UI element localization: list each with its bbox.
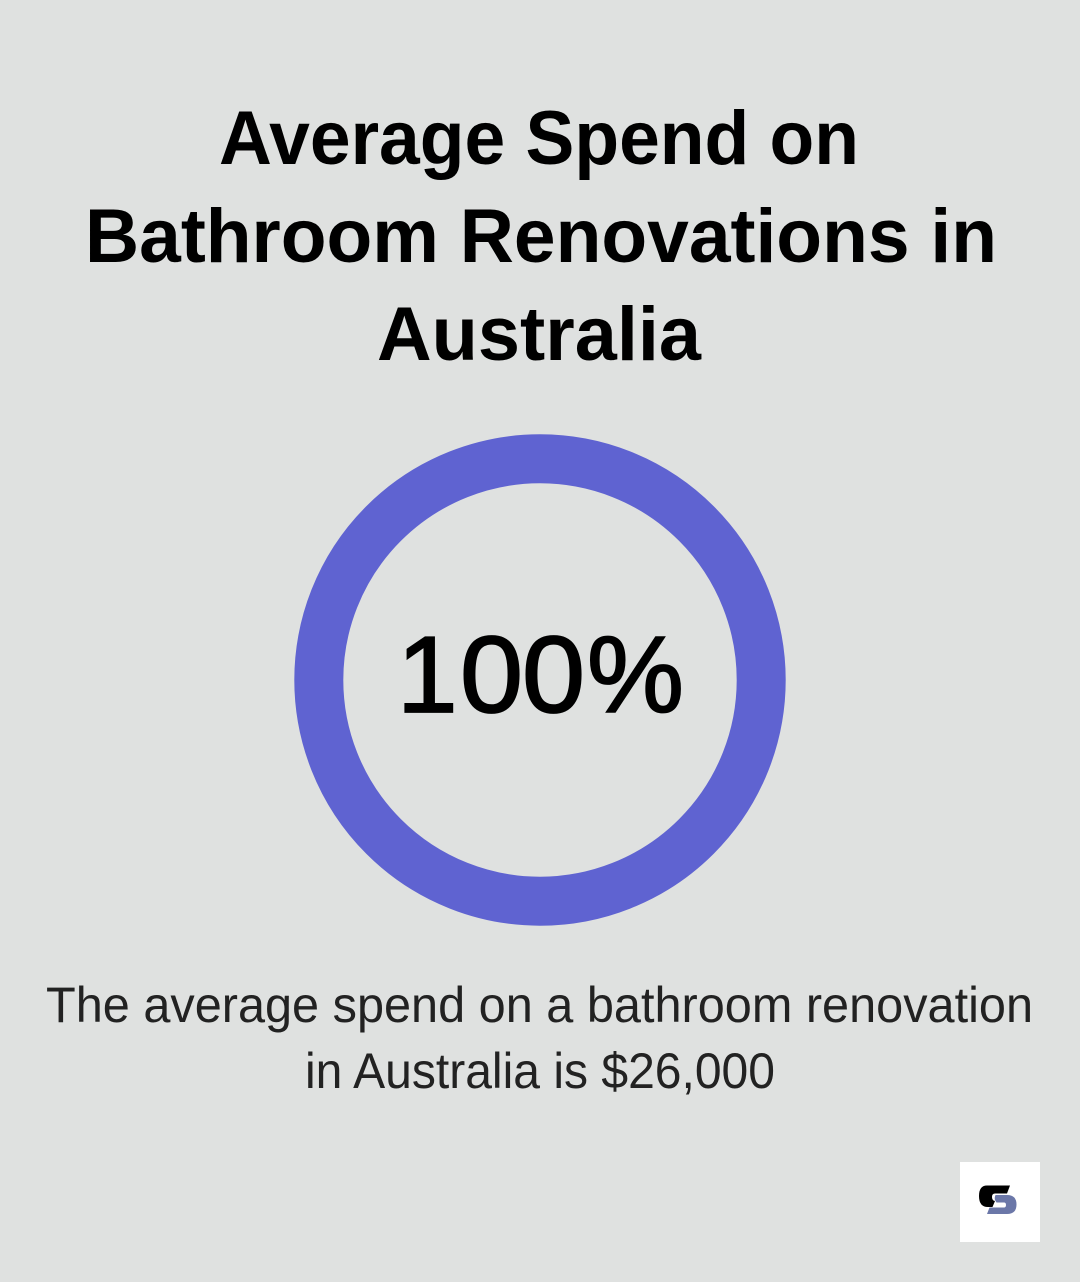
description text: The average spend on a bathroom renovation	[46, 977, 1033, 1033]
title: Average Spend on	[219, 96, 859, 181]
percentage value: 0	[460, 613, 523, 736]
title: Bathroom Renovations in	[85, 194, 997, 279]
percentage value: %	[587, 614, 684, 736]
percentage value: 1	[397, 614, 458, 736]
description text: in Australia is $26,000	[305, 1043, 775, 1099]
donut chart ring	[319, 459, 761, 901]
percentage value: 0	[522, 613, 585, 736]
percentage value	[397, 613, 684, 736]
description text	[46, 977, 1033, 1099]
title: Australia	[377, 292, 702, 377]
logo badge	[960, 1162, 1040, 1242]
title	[85, 96, 997, 377]
